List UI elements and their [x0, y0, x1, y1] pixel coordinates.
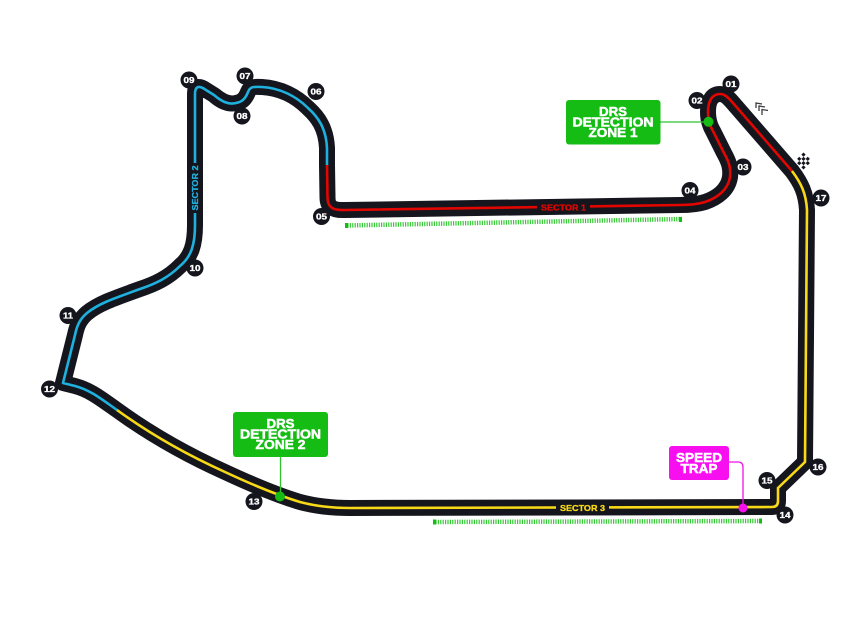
turn 01	[722, 76, 740, 92]
turn 04	[682, 182, 698, 199]
track surface	[63, 87, 807, 508]
sector 3 label: SECTOR 3	[560, 503, 605, 513]
turn 06	[308, 83, 324, 100]
turn 07	[236, 68, 254, 84]
turn 09: 09	[184, 75, 195, 85]
icon: racing direction chevrons	[756, 103, 768, 115]
turn 11	[60, 307, 76, 324]
DRS activation zone 1 marker line	[345, 217, 682, 228]
turn 04: 04	[684, 186, 696, 196]
sector 3 line	[117, 171, 807, 508]
speed trap callout: TRAP	[680, 462, 718, 476]
turn 06: 06	[310, 86, 322, 96]
sector 1 line	[327, 94, 792, 210]
turn 14	[776, 506, 794, 524]
turn 13: 13	[248, 496, 260, 506]
speed trap callout: SPEED	[676, 451, 722, 465]
turn 13	[246, 493, 262, 510]
turn 11: 11	[63, 310, 73, 320]
icon: chequered start flag	[795, 153, 812, 169]
turn 02: 02	[692, 96, 703, 106]
sector 2 line	[63, 87, 327, 410]
DRS detection zone 1 callout: DRS	[599, 105, 627, 119]
turn 12: 12	[44, 384, 55, 394]
turn 03	[734, 158, 752, 176]
DRS detection zone 2 callout: DRS	[266, 417, 294, 431]
sector 1 label: SECTOR 1	[541, 202, 586, 212]
DRS detection zone 1 callout: DETECTION	[572, 116, 654, 130]
turn 07: 07	[240, 71, 251, 81]
turn 10: 10	[190, 263, 201, 273]
turn 05: 05	[316, 212, 327, 222]
turn 01: 01	[726, 79, 737, 89]
turn 17: 17	[816, 193, 827, 203]
turn 15: 15	[762, 476, 773, 486]
speed trap callout	[669, 446, 748, 512]
DRS activation zone 2 marker line	[433, 518, 762, 524]
turn 14: 14	[780, 510, 791, 520]
DRS detection zone 2 callout: DETECTION	[240, 428, 321, 442]
DRS detection zone 2 callout	[233, 412, 328, 502]
turn 17	[812, 190, 830, 206]
turn 10	[186, 260, 204, 276]
DRS detection zone 1 callout	[566, 100, 714, 144]
sector 2 label: SECTOR 2	[190, 165, 200, 210]
turn 05	[313, 208, 330, 225]
turn 16	[810, 458, 826, 476]
DRS detection zone 2 callout: ZONE 2	[256, 438, 306, 452]
turn 16: 16	[812, 462, 824, 472]
turn 09	[180, 72, 198, 88]
turn 15	[758, 472, 776, 489]
turn 12	[41, 380, 58, 398]
turn 03: 03	[738, 162, 749, 172]
turn 08	[234, 108, 250, 124]
DRS detection zone 1 callout: ZONE 1	[588, 126, 638, 140]
turn 02	[688, 92, 706, 109]
turn 08: 08	[236, 111, 248, 121]
